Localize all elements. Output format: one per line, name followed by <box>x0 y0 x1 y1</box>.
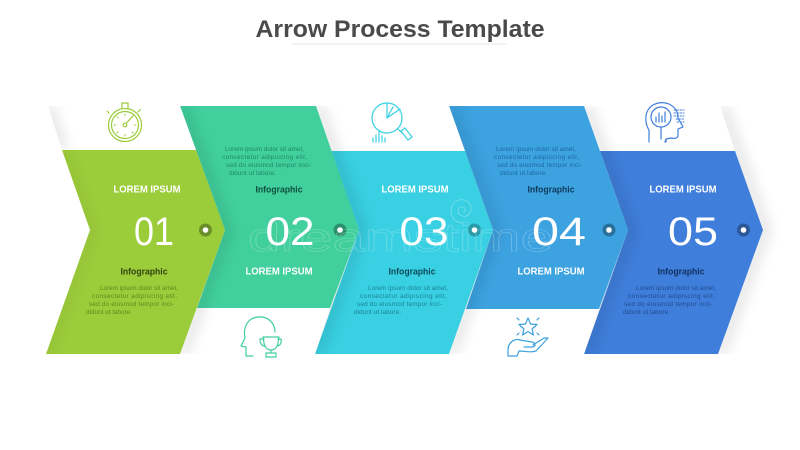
icon: pie chart under magnifier <box>372 103 412 142</box>
step 05 number: 05 <box>668 210 718 254</box>
step 02 paragraph <box>222 146 311 177</box>
step 04 connector dot <box>602 224 616 236</box>
step 05 paragraph: Lorem ipsum dolor sit amet, <box>636 285 716 292</box>
step 02 paragraph: sed do eiusmod tempor inci- <box>226 162 311 169</box>
step 03 paragraph <box>354 285 448 316</box>
icon: head with magnifier and data <box>646 103 684 142</box>
step 02 subtitle: Infographic <box>256 184 302 196</box>
step 01 heading: LOREM IPSUM <box>114 184 180 196</box>
step 01 top tail <box>48 106 196 150</box>
step 03 subtitle: Infographic <box>388 266 436 278</box>
panel: step 01 <box>46 103 227 354</box>
step 03 top tail <box>316 106 465 151</box>
watermark spiral <box>451 200 471 223</box>
step 01 connector dot <box>199 224 212 236</box>
step 03 paragraph: consectetur adipiscing elit, <box>360 293 447 300</box>
step 01 paragraph: Lorem ipsum dolor sit amet, <box>100 285 178 292</box>
step 03 connector dot <box>468 224 481 236</box>
step 05 paragraph: consectetur adipiscing elit, <box>628 293 715 300</box>
step 02 bottom tail <box>182 308 330 354</box>
step 03 shadow <box>451 106 495 354</box>
title underline <box>292 44 507 45</box>
step 02 paragraph: Lorem ipsum dolor sit amet, <box>225 146 304 153</box>
panel: step 03 <box>315 103 495 354</box>
step 01 shadow <box>182 106 227 354</box>
step 05 heading: LOREM IPSUM <box>650 184 716 196</box>
step 03 paragraph: sed do eiusmod tempor inci- <box>357 301 442 308</box>
icon: stopwatch <box>107 103 142 142</box>
panel: step 02 <box>180 106 361 357</box>
step 01 paragraph: didunt ut labore. <box>86 309 132 316</box>
step 05 paragraph: sed do eiusmod tempor inci- <box>624 301 712 308</box>
watermark <box>248 200 553 260</box>
step 01 notch shadow <box>46 150 90 354</box>
step 01 paragraph: consectetur adipiscing elit, <box>92 293 177 300</box>
step 05 arrow <box>584 151 763 354</box>
step 02 shadow <box>317 106 361 354</box>
step 04 shadow <box>586 106 630 354</box>
step 01 paragraph <box>86 285 178 316</box>
step 01 number: 01 <box>134 210 174 254</box>
step 04 bottom tail <box>449 309 599 354</box>
panel: step 04 <box>449 106 630 356</box>
step 02 arrow <box>180 106 359 308</box>
step 02 heading: LOREM IPSUM <box>246 266 312 278</box>
step 01 paragraph: sed do eiusmod tempor inci- <box>89 301 174 308</box>
step 04 arrow <box>449 106 628 309</box>
step 04 paragraph: didunt ut labore. <box>500 170 547 177</box>
title: Arrow Process Template <box>256 16 544 43</box>
step 05 subtitle: Infographic <box>658 266 704 278</box>
step 01 subtitle: Infographic <box>120 266 168 278</box>
step 03 arrow <box>315 151 493 354</box>
step 04 paragraph <box>494 146 582 177</box>
panel: step 05 <box>584 103 765 354</box>
step 03 heading: LOREM IPSUM <box>382 184 448 196</box>
step 04 paragraph: consectetur adipiscing elit, <box>494 154 579 161</box>
step 01 arrow <box>46 150 225 354</box>
step 03 paragraph: Lorem ipsum dolor sit amet, <box>368 285 448 292</box>
step 04 paragraph: Lorem ipsum dolor sit amet, <box>496 146 576 153</box>
step 05 top tail <box>584 106 735 151</box>
step 02 connector dot <box>334 224 346 236</box>
watermark wordmark: dreamstime <box>248 216 553 260</box>
step 05 shadow <box>720 106 765 354</box>
step 04 number: 04 <box>532 210 586 254</box>
step 05 paragraph: didunt ut labore. <box>623 309 670 316</box>
step 04 subtitle: Infographic <box>528 184 574 196</box>
step 04 heading: LOREM IPSUM <box>518 266 584 278</box>
step 05 paragraph <box>623 285 716 316</box>
icon: hand holding star <box>508 318 548 356</box>
step 02 paragraph: didunt ut labore. <box>229 170 276 177</box>
step 03 number: 03 <box>400 210 448 254</box>
step 04 paragraph: sed do eiusmod tempor inci- <box>497 162 582 169</box>
step 02 paragraph: consectetur adipiscing elit, <box>222 154 307 161</box>
icon: head with trophy <box>241 317 281 357</box>
step 05 connector dot <box>737 224 750 236</box>
step 02 number: 02 <box>266 210 314 254</box>
step 03 paragraph: didunt ut labore. <box>354 309 401 316</box>
step 01 tail shadow <box>48 106 62 150</box>
